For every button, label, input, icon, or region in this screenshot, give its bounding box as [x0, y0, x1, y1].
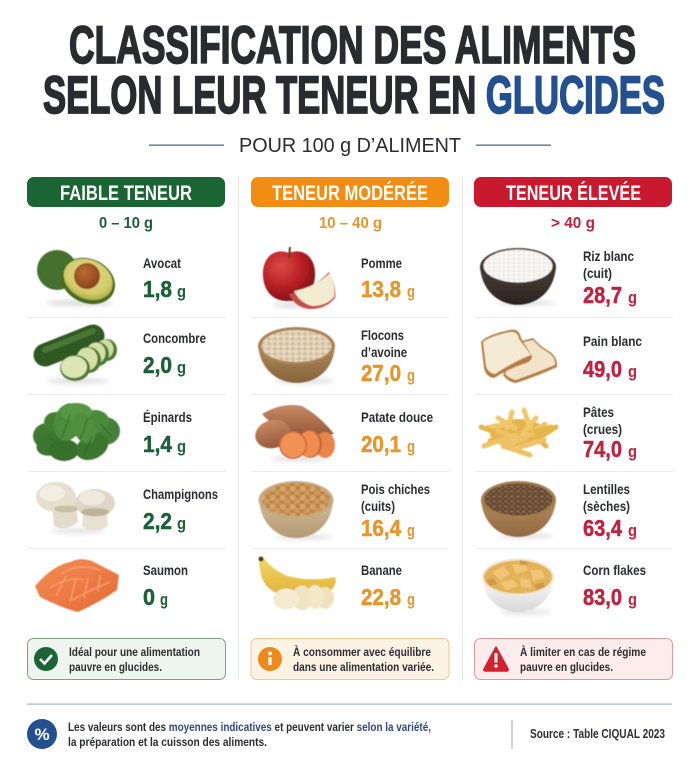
callout: modérée: [251, 638, 449, 680]
header: teneur modérée: TENEUR MODÉRÉE: [272, 182, 428, 205]
row: concombre: g: [177, 358, 186, 377]
callout: faible: pauvre en glucides.: [69, 660, 162, 674]
callout: élevée: À limiter en cas de régime: [520, 644, 646, 659]
row: pain blanc: [583, 333, 642, 382]
row: pain blanc: Pain blanc: [583, 333, 642, 349]
row: banane: g: [407, 590, 415, 609]
row: patate douce: [361, 409, 433, 457]
icon: pois chiches: [258, 481, 334, 540]
row: épinards: [143, 409, 192, 457]
panel: teneur élevée: [474, 177, 673, 680]
row: flocons d'avoine: [361, 327, 415, 386]
row: corn flakes: [583, 562, 646, 610]
row: pâtes: Pâtes: [583, 404, 614, 420]
icon: champignons: [36, 482, 115, 534]
callout: modérée: À consommer avec équilibre: [293, 644, 431, 659]
row: banane: [361, 562, 415, 610]
icon: check: [34, 647, 58, 671]
row: épinards: g: [177, 437, 186, 456]
row: pois chiches: [361, 481, 430, 541]
row: flocons d'avoine: Flocons: [361, 327, 404, 343]
callout: faible: [28, 638, 226, 680]
icon: flocons d'avoine: [258, 327, 335, 384]
row: corn flakes: g: [628, 590, 637, 609]
icon: épinards: [33, 400, 120, 465]
header: teneur modérée: [251, 177, 449, 207]
range: 0-10 g: 0 – 10 g: [99, 215, 153, 232]
icon: corn flakes: [482, 558, 554, 614]
icon: pâtes: [481, 410, 556, 455]
row: pois chiches: g: [407, 521, 415, 540]
header: teneur élevée: TENEUR ÉLEVÉE: [506, 182, 641, 205]
icon: percent: %: [34, 725, 50, 744]
row: patate douce: 20,1: [361, 431, 401, 457]
row: champignons: Champignons: [143, 486, 218, 502]
row: avocat: [143, 255, 186, 302]
row: banane: 22,8: [361, 584, 401, 610]
row: épinards: 1,4: [143, 431, 172, 457]
row: flocons d'avoine: d’avoine: [361, 344, 407, 360]
row: champignons: [143, 486, 218, 534]
row: pâtes: g: [628, 442, 637, 461]
row: riz blanc: 28,7: [583, 282, 622, 308]
row: riz blanc: Riz blanc: [583, 248, 634, 264]
row: saumon: 0: [143, 584, 155, 610]
row: pois chiches: 16,4: [361, 515, 401, 541]
row: pomme: 13,8: [361, 276, 401, 302]
row: saumon: g: [160, 590, 168, 609]
row: champignons: 2,2: [143, 508, 172, 534]
row: patate douce: g: [407, 437, 415, 456]
range: >40 g: > 40 g: [551, 215, 595, 232]
row: lentilles: g: [628, 521, 637, 540]
panel: faible teneur: [27, 177, 226, 680]
row: épinards: Épinards: [143, 409, 192, 425]
row: avocat: Avocat: [143, 255, 181, 271]
row: pâtes: (crues): [583, 421, 622, 437]
row: saumon: [143, 562, 188, 610]
row: champignons: g: [177, 514, 186, 533]
icon: riz blanc: [480, 248, 556, 306]
callout: faible: Idéal pour une alimentation: [69, 645, 200, 659]
row: concombre: [143, 330, 206, 378]
row: flocons d'avoine: g: [407, 366, 415, 385]
icon: pain blanc: [481, 330, 557, 383]
row: saumon: Saumon: [143, 562, 188, 578]
header: faible teneur: FAIBLE TENEUR: [60, 182, 192, 205]
icon: patate douce: [252, 405, 335, 462]
footer: [27, 704, 672, 749]
icon: banane: [258, 556, 336, 610]
row: flocons d'avoine: 27,0: [361, 360, 401, 386]
row: pain blanc: g: [628, 362, 637, 381]
row: concombre: 2,0: [143, 352, 172, 378]
subtitle: POUR 100 g D’ALIMENT: [239, 135, 461, 157]
row: pomme: [361, 255, 415, 302]
range: 10-40 g: 10 – 40 g: [319, 215, 382, 232]
row: avocat: 1,8: [143, 276, 172, 302]
header: teneur élevée: [474, 177, 672, 207]
icon: info: [258, 647, 282, 671]
row: pois chiches: (cuits): [361, 498, 395, 514]
row: lentilles: (sèches): [583, 498, 630, 514]
callout: modérée: dans une alimentation variée.: [293, 660, 434, 674]
row: pain blanc: 49,0: [583, 356, 622, 382]
row: corn flakes: Corn flakes: [583, 562, 646, 578]
title: [43, 16, 665, 125]
row: banane: Banane: [361, 562, 402, 578]
callout: élevée: [474, 638, 672, 680]
row: corn flakes: 83,0: [583, 584, 622, 610]
row: pois chiches: Pois chiches: [361, 481, 430, 497]
icon: pomme: [263, 247, 335, 309]
row: pomme: Pomme: [361, 255, 402, 271]
row: pomme: g: [407, 282, 415, 301]
footer note: la préparation et la cuisson des aliments.: [68, 735, 267, 749]
row: patate douce: Patate douce: [361, 409, 433, 425]
row: lentilles: [583, 481, 637, 541]
icon: percent: [27, 719, 57, 749]
icon: avocat: [37, 249, 123, 313]
row: avocat: g: [177, 282, 186, 301]
row: lentilles: 63,4: [583, 515, 622, 541]
row: riz blanc: g: [628, 288, 637, 307]
row: pâtes: [583, 404, 637, 462]
icon: warning: [484, 647, 508, 671]
row: lentilles: Lentilles: [583, 481, 630, 497]
callout: élevée: pauvre en glucides.: [520, 660, 613, 674]
row: concombre: Concombre: [143, 330, 206, 346]
icon: lentilles: [481, 481, 556, 538]
row: riz blanc: (cuit): [583, 265, 612, 281]
footer note: Les valeurs sont des moyennes indicatives et peuvent varier selon la variété,: [68, 720, 431, 734]
row: pâtes: 74,0: [583, 436, 622, 462]
icon: saumon: [35, 559, 119, 612]
source: Source : Table CIQUAL 2023: [530, 727, 665, 741]
row: riz blanc: [583, 248, 637, 308]
header: faible teneur: [27, 177, 225, 207]
footer note: [68, 720, 431, 749]
panel: teneur modérée: [251, 177, 449, 680]
icon: concombre: [45, 331, 117, 384]
